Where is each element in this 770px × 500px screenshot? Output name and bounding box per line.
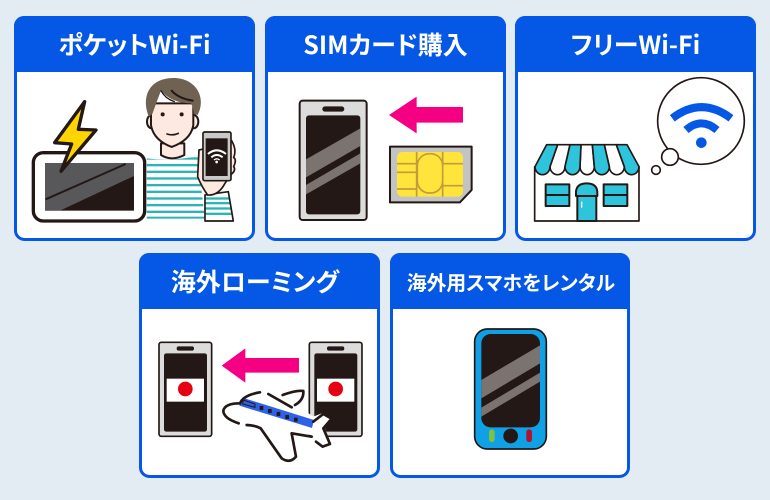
shop <box>535 145 639 221</box>
smartphone <box>300 101 367 220</box>
heading <box>139 253 380 309</box>
arrow <box>389 97 463 133</box>
indicator lights and button <box>489 429 532 443</box>
panel: SIMカード購入 <box>265 16 506 240</box>
illustration: rental phone <box>475 329 546 449</box>
illustration: shop and Wi-Fi thought bubble <box>535 78 744 221</box>
left smartphone <box>159 342 212 436</box>
panel: 海外用スマホをレンタル <box>390 253 630 476</box>
heading: 海外用スマホをレンタル <box>407 267 616 296</box>
panel frame <box>392 254 628 476</box>
icon: lightning bolt <box>55 102 96 171</box>
SIM card <box>390 147 472 202</box>
sleeve <box>203 192 235 221</box>
heading <box>515 16 756 72</box>
pocket Wi-Fi device <box>33 153 145 221</box>
man <box>145 78 208 219</box>
heading: 海外ローミング <box>171 263 340 299</box>
arrow <box>222 348 299 383</box>
illustration: phones and airplane <box>159 342 362 461</box>
panel frame <box>516 18 754 240</box>
panel: ポケットWi-Fi <box>14 16 255 240</box>
icon: Wi-Fi <box>672 107 731 148</box>
panel: 海外ローミング <box>139 253 380 476</box>
thought bubble <box>652 78 744 174</box>
panel: フリーWi-Fi <box>515 16 756 240</box>
panel frame <box>16 18 254 240</box>
illustration: phone and SIM card <box>300 97 472 220</box>
heading: ポケットWi-Fi <box>58 26 211 62</box>
heading <box>14 16 255 72</box>
hand <box>198 141 235 195</box>
smartphone <box>203 132 231 181</box>
heading <box>390 253 630 309</box>
heading: フリーWi-Fi <box>571 26 700 62</box>
illustration: man with phone and pocket Wi-Fi <box>33 78 235 221</box>
airplane <box>223 391 332 461</box>
heading: SIMカード購入 <box>303 26 468 62</box>
heading <box>265 16 506 72</box>
panel frame <box>266 18 504 240</box>
panel frame <box>140 254 378 476</box>
right smartphone <box>309 342 362 436</box>
